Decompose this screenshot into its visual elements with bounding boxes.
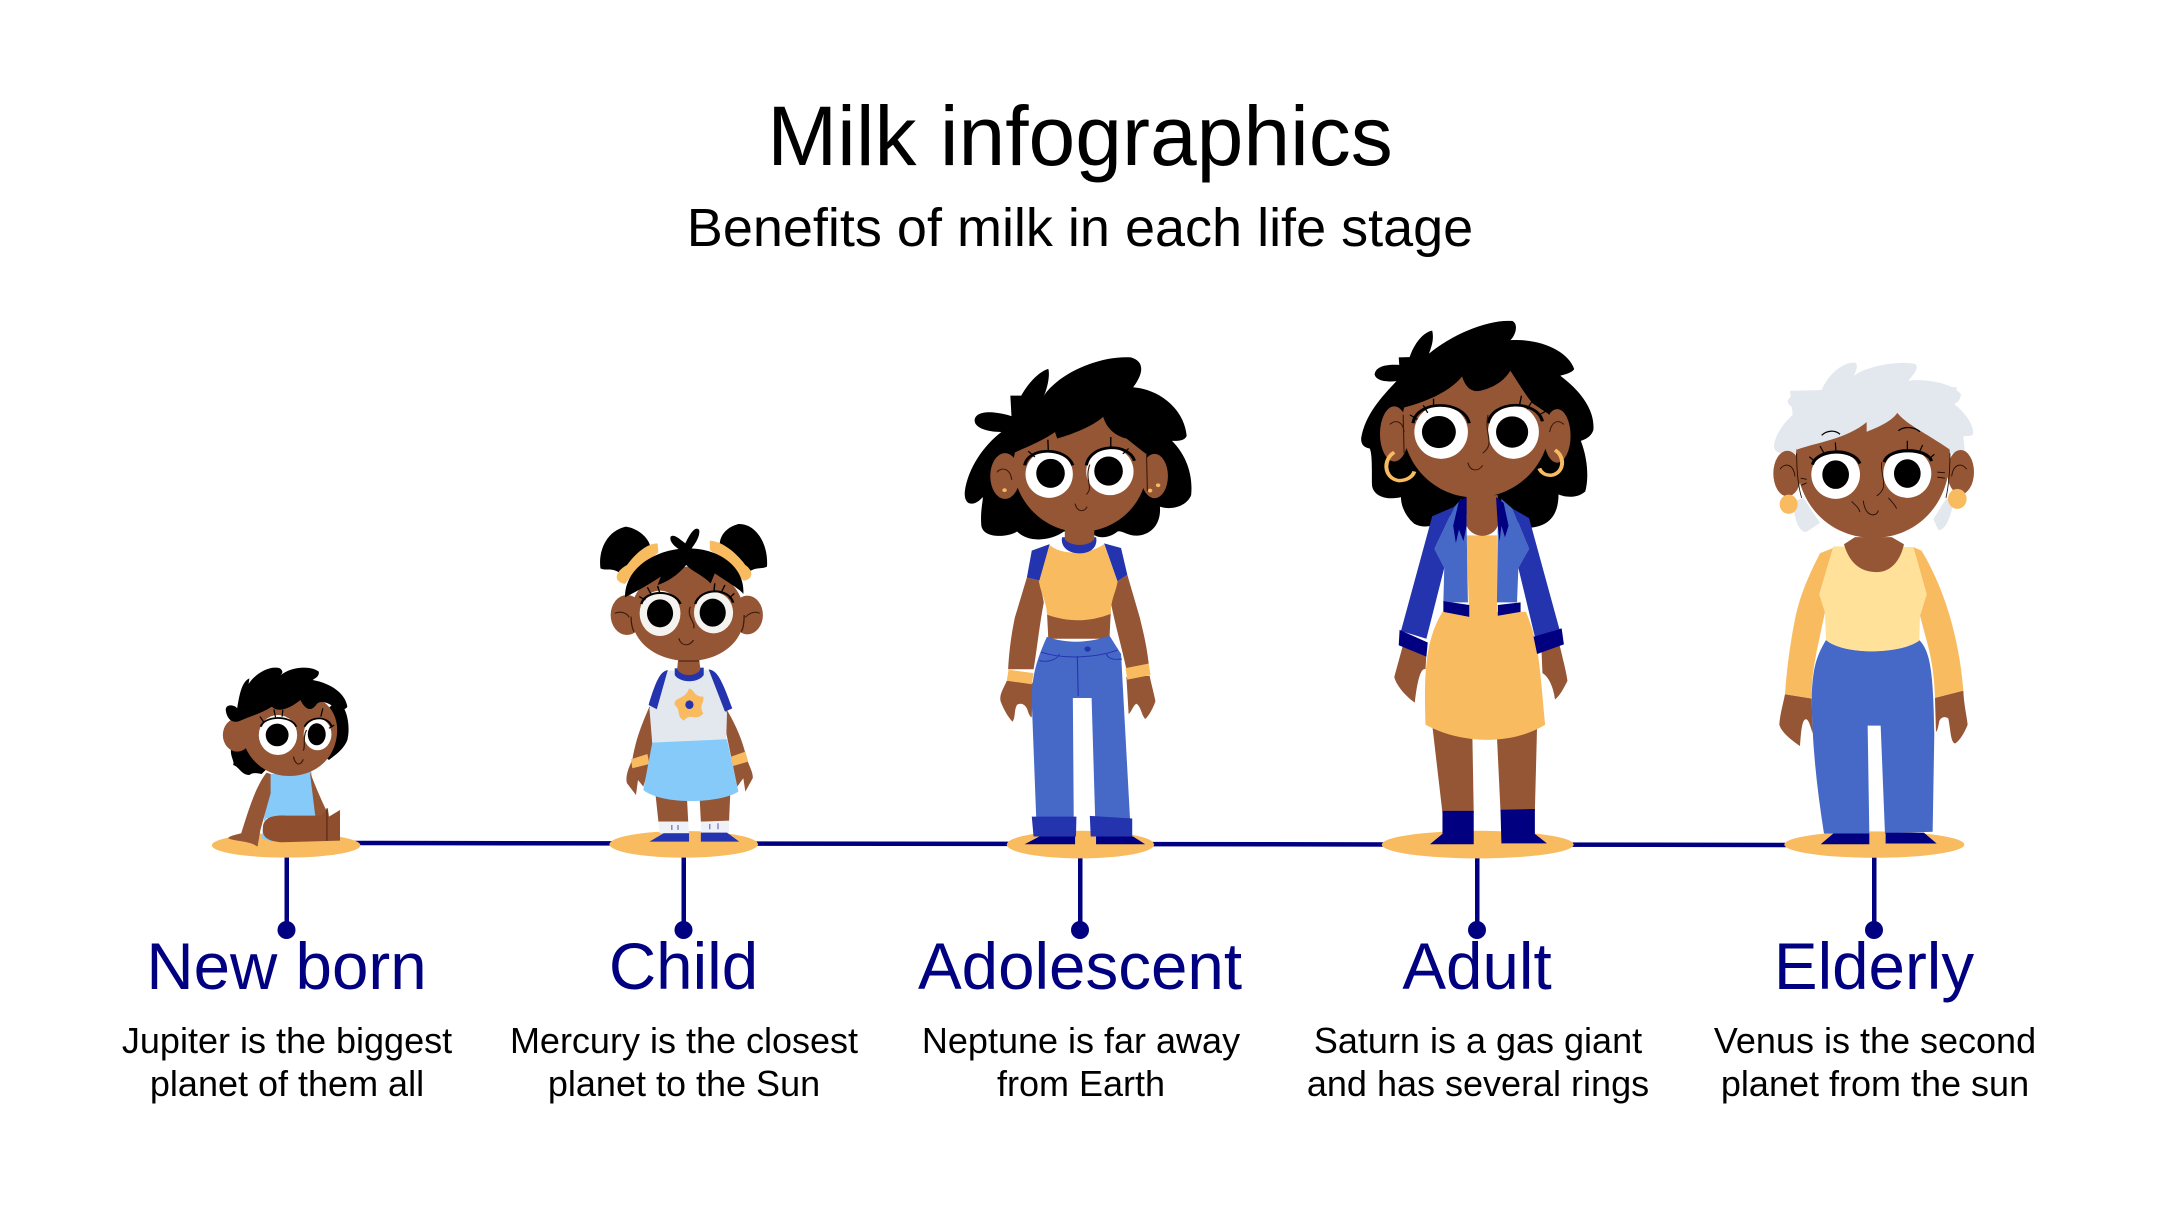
description: adult: and has several rings	[1307, 1063, 1649, 1104]
figure: adult	[1361, 321, 1594, 858]
stem and dot: adult	[1468, 855, 1486, 939]
description: child: Mercury is the closest	[510, 1020, 858, 1061]
description: child: planet to the Sun	[548, 1063, 820, 1104]
stage: adolescent	[918, 855, 1242, 1104]
stem and dot: new born	[278, 855, 296, 939]
heading: adolescent: Adolescent	[918, 930, 1242, 1003]
description: adolescent: Neptune is far away	[922, 1020, 1240, 1061]
description: elderly: Venus is the second	[1714, 1020, 2036, 1061]
heading: elderly: Elderly	[1774, 930, 1974, 1003]
stage: new born	[122, 855, 452, 1104]
heading: adult: Adult	[1402, 930, 1552, 1003]
stem and dot: elderly	[1865, 855, 1883, 939]
figure: elderly	[1773, 363, 1974, 858]
stem and dot: child	[674, 855, 692, 939]
title: Milk infographics	[767, 89, 1393, 183]
figure: adolescent	[965, 357, 1191, 858]
stage: elderly	[1714, 855, 2036, 1104]
stem and dot: adolescent	[1071, 855, 1089, 939]
stage: adult	[1307, 855, 1649, 1104]
figure: baby	[212, 668, 360, 858]
description: elderly: planet from the sun	[1721, 1063, 2029, 1104]
description: adolescent: from Earth	[997, 1063, 1165, 1104]
description: new born: Jupiter is the biggest	[122, 1020, 452, 1061]
description: new born: planet of them all	[150, 1063, 424, 1104]
heading: child: Child	[609, 930, 758, 1003]
subtitle: Benefits of milk in each life stage	[687, 198, 1473, 258]
stage: child	[510, 855, 858, 1104]
timeline line	[350, 843, 1800, 845]
figure: child	[600, 524, 767, 858]
heading: new born: New born	[146, 930, 427, 1003]
description: adult: Saturn is a gas giant	[1314, 1020, 1642, 1061]
